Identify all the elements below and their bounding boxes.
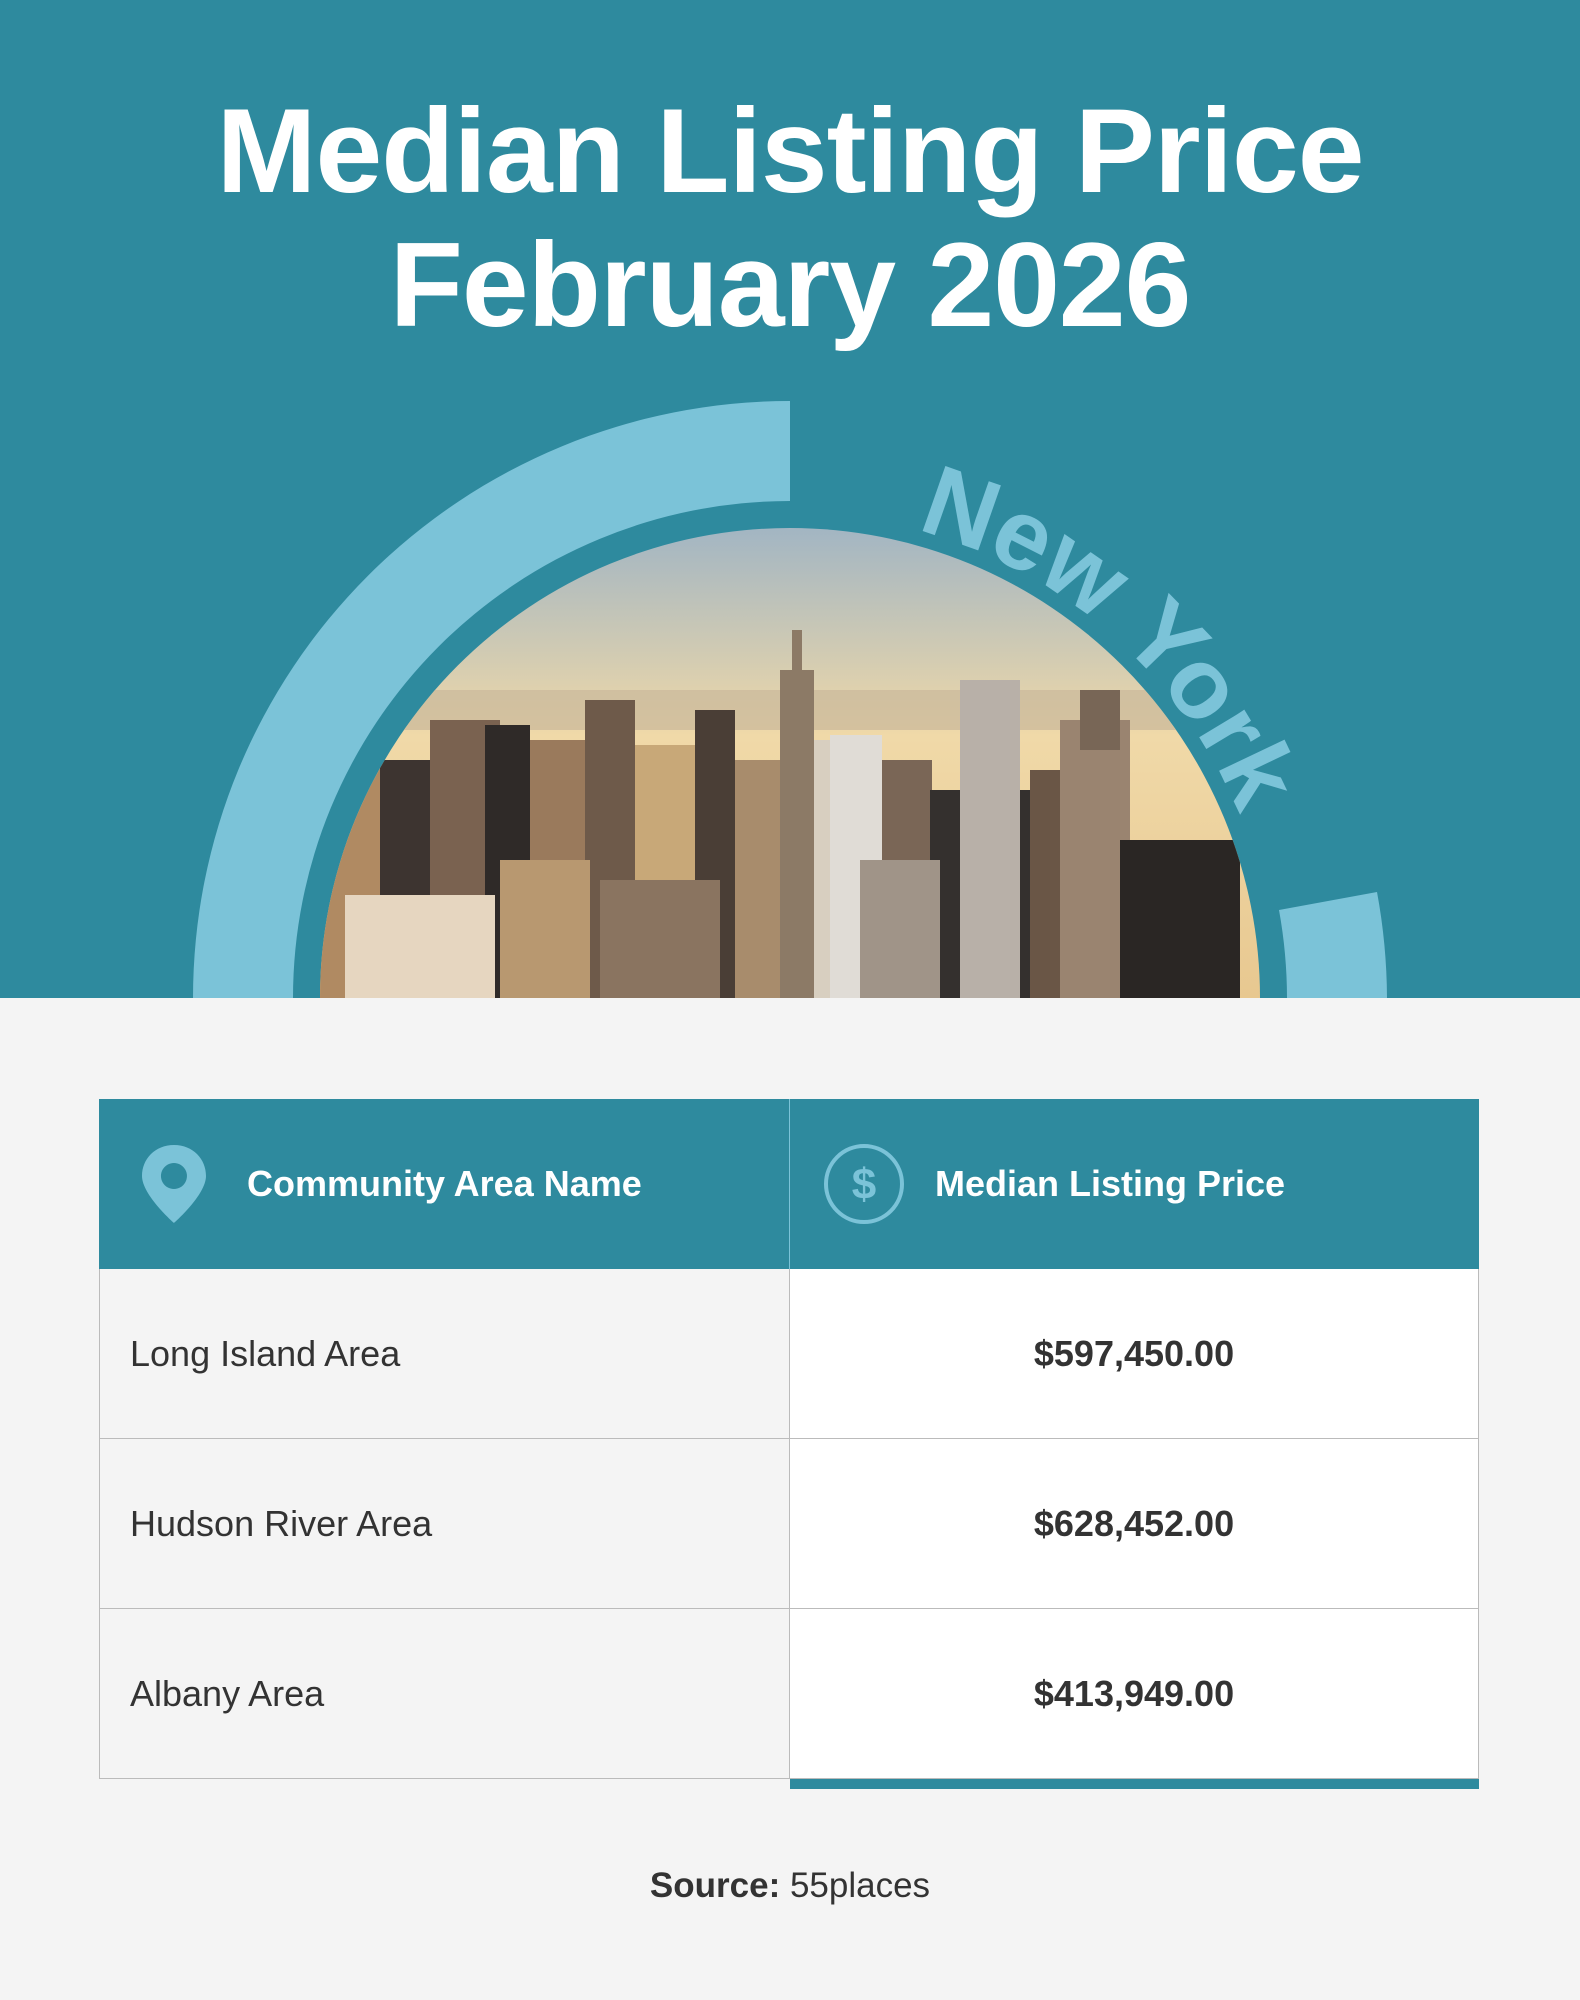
title: February 2026	[390, 218, 1190, 352]
hero graphic: New York	[922, 466, 1290, 815]
title: Median Listing Price	[217, 84, 1363, 218]
photo: city skyline	[300, 520, 1280, 1000]
header band	[0, 0, 1580, 998]
row 3	[99, 1609, 790, 1779]
row 2: Hudson River Area	[130, 1502, 432, 1544]
arc decoration	[193, 401, 1387, 998]
icon: dollar: $	[852, 1160, 876, 1209]
icon: dollar	[824, 1144, 904, 1224]
table: $413,949.00	[1034, 1672, 1234, 1714]
row 1	[99, 1269, 790, 1439]
icon: pin	[142, 1145, 206, 1223]
header: price: Median Listing Price	[935, 1163, 1285, 1204]
New York label	[916, 530, 1268, 914]
row 1: Long Island Area	[130, 1332, 400, 1374]
table: $597,450.00	[1034, 1332, 1234, 1374]
source: Source: 55places	[650, 1866, 930, 1905]
header: community	[99, 1099, 790, 1269]
table: $628,452.00	[1034, 1502, 1234, 1544]
table	[99, 1099, 1479, 1789]
header: price	[790, 1099, 1479, 1269]
hero graphic	[193, 401, 1387, 998]
row 3: Albany Area	[130, 1672, 324, 1714]
title	[217, 84, 1363, 352]
header: community: Community Area Name	[247, 1163, 642, 1204]
row 2	[99, 1439, 790, 1609]
accent bar	[790, 1779, 1479, 1789]
